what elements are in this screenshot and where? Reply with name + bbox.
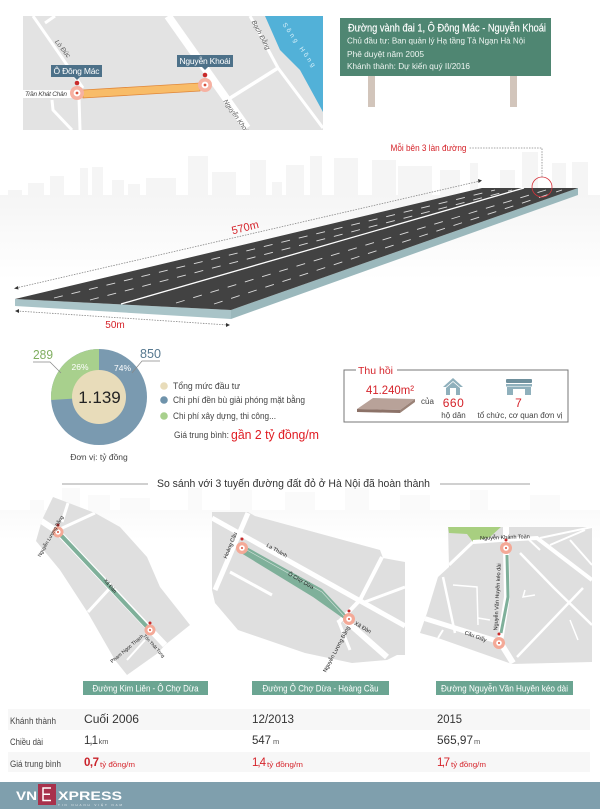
row: Giá trung bình xyxy=(10,757,486,769)
panel: Thu hồi: hộ dân xyxy=(441,411,466,420)
row: Chiều dài: 547 xyxy=(252,735,271,747)
panel: Thu hồi: 660 xyxy=(443,396,464,410)
label: Ô Chợ Dừa - Hoàng Cầu xyxy=(252,681,389,695)
row: Chiều dài: 1,1 xyxy=(84,735,98,747)
sign details xyxy=(347,36,525,71)
signboard xyxy=(340,18,551,107)
row: Chiều dài xyxy=(10,735,480,747)
heading: comparison: So sánh với 3 tuyến đường đất đỏ ở Hà Nội đã hoàn thành xyxy=(157,478,430,490)
label: Kim Liên - Ô Chợ Dừa xyxy=(83,681,208,695)
footer bar xyxy=(0,782,600,809)
label: Nguyễn Văn Huyên kéo dài: Đường Nguyễn Văn Huyên kéo dài xyxy=(441,684,568,694)
label: Nguyễn Văn Huyên kéo dài xyxy=(436,681,573,695)
row: Giá trung bình: tỷ đồng/m xyxy=(451,760,486,769)
sign details: Phê duyệt năm 2005 xyxy=(347,49,424,59)
map: Ô Đông Mác - Nguyễn Khoái: Lò Đúc xyxy=(53,39,72,60)
legend: Tổng mức đầu tư xyxy=(173,381,240,391)
donut chart: Đơn vị: tỷ đồng xyxy=(70,452,128,462)
dimension: 50m xyxy=(15,309,230,331)
row: Chiều dài: 565,97 xyxy=(437,735,473,747)
label: Kim Liên - Ô Chợ Dừa: Đường Kim Liên - Ô Chợ Dừa xyxy=(92,684,198,694)
map: Ô Đông Mác - Nguyễn Khoái: Bạch Đằng xyxy=(250,19,273,51)
donut chart: 1.139 xyxy=(78,388,121,407)
map: Nguyễn Văn Huyên kéo dài: Cầu Giấy xyxy=(464,630,487,644)
logo: VnExpress: XPRESS xyxy=(58,789,122,803)
panel: Thu hồi xyxy=(344,365,568,422)
donut chart: 26% xyxy=(71,362,89,372)
logo: VnExpress xyxy=(16,784,122,807)
marker: Nguyễn Khoái: Nguyễn Khoái xyxy=(180,56,231,66)
row: Khánh thành xyxy=(10,714,462,726)
callout: lanes per side xyxy=(390,143,552,197)
row: Chiều dài: m xyxy=(474,737,480,746)
donut chart: 850 xyxy=(140,347,161,361)
row: Chiều dài: m xyxy=(273,737,279,746)
sign details: Khánh thành: Dự kiến quý II/2016 xyxy=(347,61,470,71)
map: Ô Chợ Dừa - Hoàng Cầu: Nguyễn Lương Bằng xyxy=(322,625,352,674)
row: Giá trung bình: 1,7 xyxy=(437,757,450,769)
marker: Ô Đông Mác xyxy=(51,65,102,100)
row: Khánh thành: 12/2013 xyxy=(252,714,294,726)
legend: Giá trung bình: xyxy=(174,430,229,440)
label: Ô Chợ Dừa - Hoàng Cầu: Đường Ô Chợ Dừa - Hoàng Cầu xyxy=(262,684,378,694)
donut chart xyxy=(33,347,161,462)
row: Khánh thành: 2015 xyxy=(437,714,462,726)
sign title: Đường vành đai 1, Ô Đông Mác - Nguyễn Khoái xyxy=(348,22,546,34)
row: Giá trung bình: tỷ đồng/m xyxy=(267,760,303,769)
map: Kim Liên - Ô Chợ Dừa: Nguyễn Lương Bằng xyxy=(36,514,66,558)
map: Ô Chợ Dừa - Hoàng Cầu xyxy=(212,512,405,672)
map: Ô Chợ Dừa - Hoàng Cầu: La Thành xyxy=(265,543,288,560)
map: Kim Liên - Ô Chợ Dừa: Phạm Ngọc Thạch xyxy=(110,634,145,665)
donut chart: 289 xyxy=(33,348,53,362)
row: Giá trung bình: 0,7 xyxy=(84,757,99,769)
map: Ô Chợ Dừa - Hoàng Cầu: Hoàng Cầu xyxy=(223,532,239,560)
logo: VnExpress: TIN NHANH VIỆT NAM xyxy=(58,802,122,807)
marker: Ô Đông Mác: Ô Đông Mác xyxy=(54,66,100,76)
dimension: 50m: 50m xyxy=(105,320,125,331)
legend xyxy=(160,381,319,442)
dimension: 570m: 570m xyxy=(230,219,260,237)
logo: VnExpress: VN xyxy=(16,789,37,803)
icon: land plot xyxy=(357,398,415,413)
icon: house xyxy=(443,378,463,395)
row: Khánh thành: Cuối 2006 xyxy=(84,714,139,726)
icon: office xyxy=(506,379,532,395)
panel: Thu hồi: 7 xyxy=(515,396,522,410)
map: Ô Chợ Dừa - Hoàng Cầu: Xã Đàn xyxy=(353,621,372,635)
legend: Chi phí xây dựng, thi công... xyxy=(173,411,276,421)
map: Kim Liên - Ô Chợ Dừa: Xã Đàn xyxy=(102,578,118,595)
donut chart: 74% xyxy=(114,363,131,373)
highlighted road segment xyxy=(83,83,200,98)
callout: lanes per side: Mỗi bên 3 làn đường xyxy=(390,143,466,154)
dimension: 570m xyxy=(14,179,482,290)
panel: Thu hồi: Thu hồi xyxy=(358,365,393,377)
river: Sông Hồng xyxy=(265,16,323,112)
row: Chiều dài: km xyxy=(98,737,108,746)
row: Chiều dài: Chiều dài xyxy=(10,737,43,747)
map: Kim Liên - Ô Chợ Dừa: Tôn Thất Tùng xyxy=(142,633,166,659)
road illustration xyxy=(15,188,578,319)
panel: Thu hồi: của xyxy=(421,397,434,406)
marker: Nguyễn Khoái xyxy=(177,55,233,92)
map: Ô Đông Mác - Nguyễn Khoái: Trần Khát Chân xyxy=(25,89,67,98)
sign details: Chủ đầu tư: Ban quản lý Hạ tầng Tả Ngạn Hà Nội xyxy=(347,36,525,46)
row: Giá trung bình: 1,4 xyxy=(252,757,267,769)
map: Ô Đông Mác - Nguyễn Khoái: Nguyễn Khoái xyxy=(222,97,253,136)
skyline background xyxy=(0,152,600,280)
row: Khánh thành: Khánh thành xyxy=(10,716,56,726)
map: Nguyễn Văn Huyên kéo dài xyxy=(420,527,592,664)
row: Giá trung bình: Giá trung bình xyxy=(10,759,61,769)
legend: gần 2 tỷ đồng/m xyxy=(231,428,319,442)
comparison table xyxy=(8,709,590,772)
row: Giá trung bình: tỷ đồng/m xyxy=(100,760,135,769)
panel: Thu hồi: tổ chức, cơ quan đơn vị xyxy=(478,411,563,420)
map: Ô Chợ Dừa - Hoàng Cầu: Ô Chợ Dừa xyxy=(287,570,316,591)
map: Kim Liên - Ô Chợ Dừa xyxy=(36,497,190,675)
legend: Chi phí đền bù giải phóng mặt bằng xyxy=(173,395,305,405)
panel: Thu hồi: 41.240m² xyxy=(366,383,414,397)
comparison skyline background xyxy=(0,488,600,540)
map: Nguyễn Văn Huyên kéo dài: Nguyễn Khánh Toàn xyxy=(480,533,530,542)
map: Ô Đông Mác - Nguyễn Khoái xyxy=(23,16,323,136)
map: Nguyễn Văn Huyên kéo dài: Nguyễn Văn Huyên kéo dài xyxy=(492,563,503,631)
map: Ô Đông Mác - Nguyễn Khoái: Sông Hồng xyxy=(281,20,320,71)
